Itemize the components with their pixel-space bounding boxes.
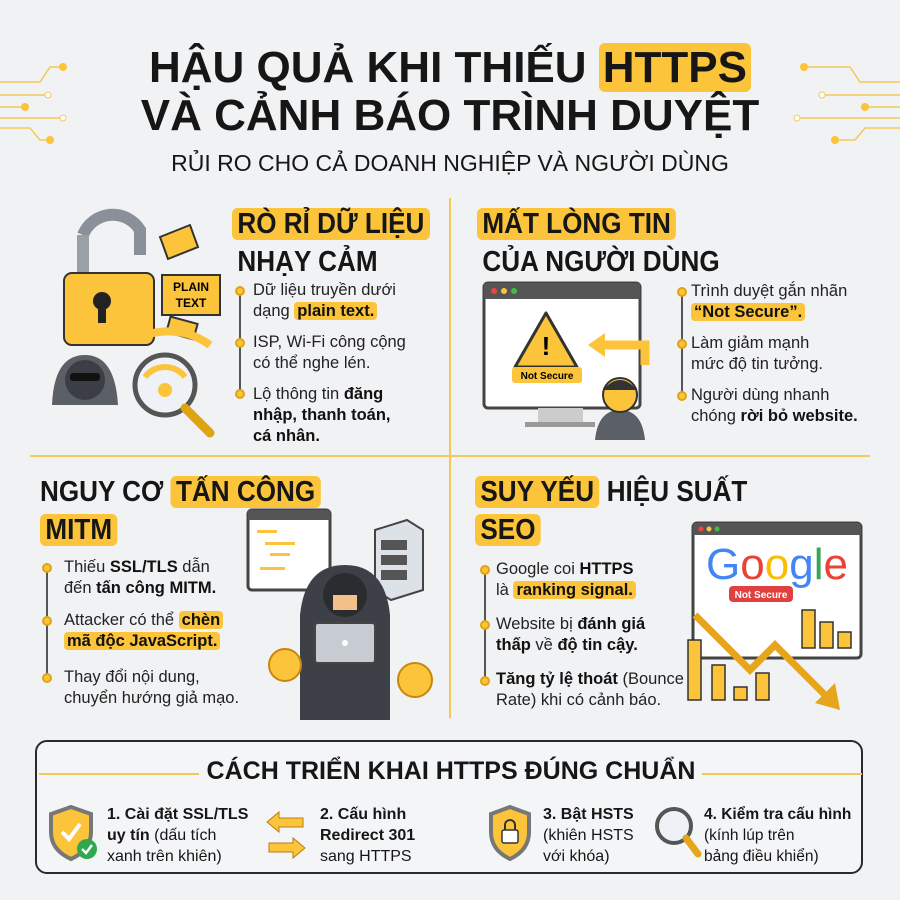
- bullet list: nhập, thanh toán,: [253, 406, 390, 424]
- bullet list: thấp về độ tin cậy.: [496, 636, 638, 654]
- step 3: 3. Bật HSTS: [543, 806, 634, 823]
- title: HẬU QUẢ KHI THIẾU HTTPS: [149, 43, 747, 92]
- heading: SUY YẾU HIỆU SUẤT: [480, 476, 747, 508]
- bullet list: Attacker có thể chèn: [64, 611, 220, 629]
- bullet list: mã độc JavaScript.: [67, 632, 217, 650]
- step 2: [266, 806, 415, 865]
- illustration: monitor with warning: Not Secure: [521, 371, 574, 382]
- step 4: 4. Kiểm tra cấu hình: [704, 806, 851, 823]
- illustration: hacker with laptop and server: [246, 508, 433, 720]
- icon: shield check: [49, 804, 97, 862]
- illustration: monitor with warning: [482, 282, 650, 440]
- heading: CÁCH TRIỂN KHAI HTTPS ĐÚNG CHUẨN: [207, 757, 695, 785]
- step 3: (khiên HSTS: [543, 827, 634, 844]
- bullet list: Rate) khi có cảnh báo.: [496, 691, 661, 709]
- step 2: 2. Cấu hình: [320, 806, 406, 823]
- icon: redirect arrows: [266, 810, 306, 860]
- bullet list: đến tấn công MITM.: [64, 579, 216, 597]
- step 4: bảng điều khiển): [704, 848, 819, 865]
- bullet list: Website bị đánh giá: [496, 615, 645, 633]
- step 1: xanh trên khiên): [107, 848, 222, 865]
- bullet list: “Not Secure”.: [694, 303, 802, 321]
- icon: shield lock: [489, 804, 531, 862]
- illustration: open lock and hacker: [52, 208, 221, 438]
- bullet list: Google coi HTTPS: [496, 560, 634, 578]
- step 1: [49, 804, 248, 865]
- bullet list: Lộ thông tin đăng: [253, 385, 383, 403]
- illustration: open lock and hacker: PLAIN: [173, 280, 209, 294]
- step 1: 1. Cài đặt SSL/TLS: [107, 806, 248, 823]
- step 2: sang HTTPS: [320, 848, 412, 865]
- bullet list: cá nhân.: [253, 427, 320, 445]
- bullet list: Trình duyệt gắn nhãn: [691, 282, 847, 300]
- bullet list: ISP, Wi-Fi công cộng: [253, 333, 406, 351]
- illustration: Google window with falling chart: Not Secure: [735, 590, 788, 601]
- panel: loss of trust: [477, 207, 858, 440]
- bullet list: có thể nghe lén.: [253, 354, 370, 372]
- title: RỦI RO CHO CẢ DOANH NGHIỆP VÀ NGƯỜI DÙNG: [171, 150, 729, 176]
- heading: MITM: [45, 514, 112, 546]
- bullet list: Người dùng nhanh: [691, 386, 829, 404]
- heading: [475, 475, 748, 546]
- illustration: Google window with falling chart: Google: [706, 540, 848, 589]
- bullet list: [480, 560, 684, 709]
- bullet list: [677, 281, 858, 425]
- heading: CỦA NGƯỜI DÙNG: [482, 246, 720, 278]
- illustration: monitor with warning: !: [542, 331, 550, 361]
- heading: [477, 207, 720, 278]
- panel: MITM attack: [40, 475, 433, 720]
- panel: data leak: [52, 207, 430, 445]
- step 4: [655, 806, 851, 865]
- step 2: Redirect 301: [320, 827, 415, 844]
- step 1: uy tín (dấu tích: [107, 827, 216, 844]
- bullet list: chóng rời bỏ website.: [691, 407, 858, 425]
- heading: [232, 207, 430, 278]
- bullet list: chuyển hướng giả mạo.: [64, 689, 239, 707]
- icon: magnifier: [655, 807, 702, 858]
- panel: SEO: [475, 475, 862, 710]
- bullet list: Thiếu SSL/TLS dẫn: [64, 558, 210, 576]
- bullet list: dạng plain text.: [253, 302, 374, 320]
- bullet list: Tăng tỷ lệ thoát (Bounce: [496, 670, 684, 688]
- bullet list: là ranking signal.: [496, 581, 633, 599]
- bullet list: [235, 281, 406, 445]
- bullet list: mức độ tin tưởng.: [691, 355, 823, 373]
- decorative circuit lines: [0, 63, 900, 144]
- heading: NHẠY CẢM: [237, 246, 378, 278]
- heading: RÒ RỈ DỮ LIỆU: [237, 208, 424, 240]
- bullet list: Thay đổi nội dung,: [64, 668, 200, 686]
- bullet list: [42, 557, 239, 707]
- quadrant dividers: [449, 198, 451, 718]
- bullet list: Làm giảm mạnh: [691, 334, 809, 352]
- illustration: Google window with falling chart: [687, 522, 862, 710]
- heading: SEO: [480, 514, 536, 546]
- step 3: [489, 804, 634, 865]
- step 4: (kính lúp trên: [704, 827, 794, 844]
- step 3: với khóa): [543, 848, 610, 865]
- bullet list: Dữ liệu truyền dưới: [253, 281, 396, 299]
- title: VÀ CẢNH BÁO TRÌNH DUYỆT: [141, 91, 759, 140]
- heading: MẤT LÒNG TIN: [482, 208, 671, 240]
- illustration: open lock and hacker: TEXT: [176, 296, 207, 310]
- heading: NGUY CƠ TẤN CÔNG: [40, 476, 315, 508]
- panel: how to implement HTTPS: [35, 740, 863, 874]
- title: [141, 43, 759, 176]
- heading: [40, 475, 321, 546]
